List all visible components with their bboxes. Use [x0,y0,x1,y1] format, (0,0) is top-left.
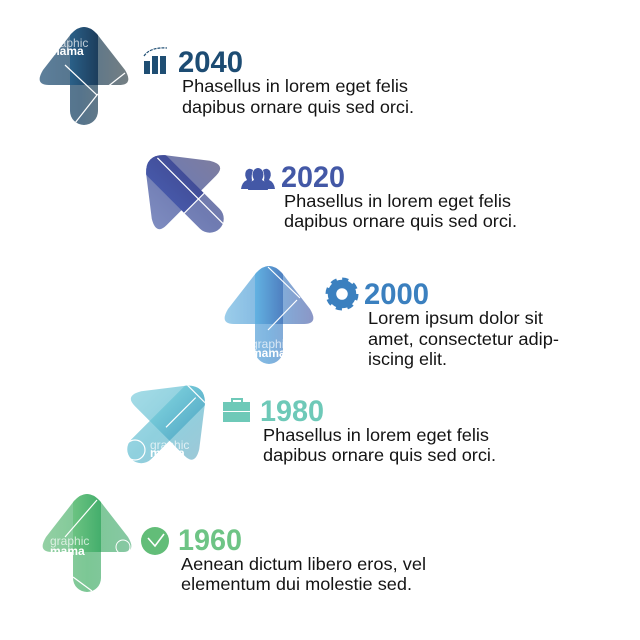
text 1960: Aenean dictum libero eros, vel [181,554,426,574]
arrow 2000: graphic [251,337,290,351]
text 2000: Lorem ipsum dolor sit [368,308,543,328]
icon: rising bar chart [144,48,167,74]
infographic: timeline of arrows [40,27,558,592]
text 2040: Phasellus in lorem eget felis [182,76,408,96]
arrow 2040 [40,24,128,125]
watermark 1980: mama [150,446,185,460]
text 2020: dapibus ornare quis sed orci. [284,211,517,231]
icon: gear [328,280,356,308]
icon: clock [141,527,169,555]
watermark 1980 [125,438,189,460]
text 1980: Phasellus in lorem eget felis [263,425,489,445]
text 1960: elementum dui molestie sed. [181,574,412,594]
arrow 2040: mama [49,44,84,58]
text 2040: dapibus ornare quis sed orci. [182,97,414,117]
year 2040: 2040 [178,46,243,79]
arrow 2040: graphic [49,36,88,50]
icon: briefcase [223,398,250,422]
text 2000: amet, consectetur adip- [368,329,559,349]
year 2000: 2000 [364,278,429,311]
text 2020: Phasellus in lorem eget felis [284,191,511,211]
arrow 2020 [146,155,224,233]
year 1960: 1960 [178,524,242,557]
arrow 1980 [127,386,205,464]
year 2020: 2020 [281,161,345,194]
text 2000: iscing elit. [368,349,447,369]
watermark 1980: graphic [150,438,189,452]
text 1980: dapibus ornare quis sed orci. [263,445,496,465]
arrow 1960: graphic [50,534,89,548]
icon: people [241,168,275,190]
arrow 1960 [43,491,131,592]
arrow 2000 [225,263,313,364]
year 1980: 1980 [260,395,324,428]
arrow 1960: mama [50,544,85,558]
arrow 2000: mama [251,346,286,360]
